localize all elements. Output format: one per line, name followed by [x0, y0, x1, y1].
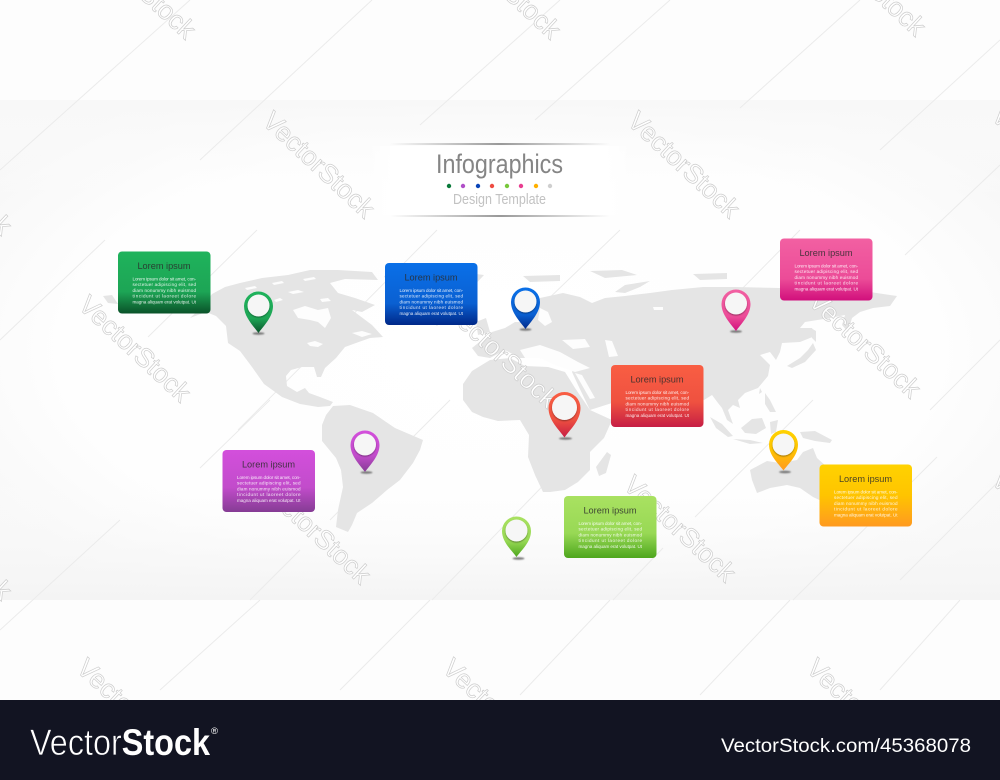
panel: purple: diam nonummy nibh euismod: [237, 486, 301, 491]
panel: green: [118, 252, 210, 314]
registered mark: ®: [211, 726, 218, 737]
australia: [750, 448, 838, 505]
panel: purple: [222, 450, 315, 512]
panel: lime: diam nonummy nibh euismod: [578, 532, 642, 537]
pin: green: [244, 292, 273, 335]
russian arctic islands: [523, 270, 727, 293]
south america: [322, 405, 423, 532]
panel: blue: diam nonummy nibh euismod: [400, 299, 463, 304]
panel: yellow: diam nonummy nibh euismod: [834, 501, 898, 506]
panel: red: diam nonummy nibh euismod: [626, 401, 689, 406]
panel: yellow: Lorem ipsum dolor sit amet, con-: [834, 490, 898, 494]
title: Infographics: [436, 149, 563, 179]
greenland: [384, 270, 484, 326]
world map: [103, 270, 898, 532]
watermarks: VectorStock: [618, 469, 742, 588]
panel: pink: [780, 238, 872, 300]
pin: red: [548, 392, 580, 440]
panel: blue: Lorem ipsum: [404, 272, 458, 282]
colour dots: [447, 184, 552, 188]
panel: blue: magna aliquam erat volutpat. Ut: [400, 311, 464, 316]
pin: pink: [722, 290, 750, 333]
panel: pink: Lorem ipsum dolor sit amet, con-: [794, 264, 858, 268]
panel: purple: tincidunt ut laoreet dolore: [237, 492, 301, 497]
panel: lime: Lorem ipsum dolor sit amet, con-: [578, 521, 642, 526]
panel: green: diam nonummy nibh euismod: [132, 288, 196, 293]
watermarks: VectorStock: [257, 105, 381, 224]
panel: blue: Lorem ipsum dolor sit amet, con-: [400, 288, 463, 293]
watermarks: VectorStock: [803, 285, 927, 404]
central background band: [0, 100, 1000, 600]
africa: [463, 358, 612, 492]
watermarks: VectorStock: [71, 652, 195, 771]
panel: lime: Lorem ipsum: [583, 506, 637, 516]
panel: lime: [564, 496, 656, 558]
panel: green: tincidunt ut laoreet dolore: [132, 294, 196, 299]
new zealand: [888, 505, 898, 520]
pin: blue: [511, 288, 540, 331]
pin: purple: [350, 430, 380, 474]
watermarks: VectorStock: [440, 295, 564, 414]
watermarks: VectorStock: [801, 652, 925, 771]
panel: red: Lorem ipsum dolor sit amet, con-: [626, 390, 689, 395]
panel: pink: sectetuer adipiscing elit, sed: [794, 269, 858, 274]
panel: red: Lorem ipsum: [630, 374, 684, 384]
panel: blue: tincidunt ut laoreet dolore: [400, 305, 463, 310]
panel: purple: sectetuer adipiscing elit, sed: [237, 481, 301, 486]
pin: lime: [502, 516, 531, 560]
footer bar: [0, 700, 1000, 780]
panel: red: sectetuer adipiscing elit, sed: [626, 396, 689, 401]
watermarks: VectorStock: [73, 289, 197, 408]
watermarks: VectorStock: [622, 105, 746, 224]
panel: purple: Lorem ipsum: [242, 460, 295, 470]
panel: green: Lorem ipsum dolor sit amet, con-: [132, 276, 196, 282]
watermarks: VectorStock: [253, 471, 377, 590]
eurasia: [472, 287, 897, 424]
panel: blue: [385, 263, 478, 325]
southeast asia islands: [710, 388, 832, 444]
panel: green: magna aliquam erat volutpat. Ut: [132, 299, 197, 304]
uk and iceland: [455, 298, 490, 335]
panel: lime: sectetuer adipiscing elit, sed: [578, 527, 642, 532]
panel: yellow: tincidunt ut laoreet dolore: [834, 507, 898, 512]
panel: green: Lorem ipsum: [137, 261, 191, 271]
north america: [190, 270, 383, 407]
panel: red: [611, 365, 704, 427]
watermarks: VectorStock: [437, 652, 561, 771]
panel: pink: diam nonummy nibh euismod: [794, 275, 858, 280]
panel: yellow: Lorem ipsum: [839, 474, 892, 484]
footer url: VectorStock.com/45368078: [721, 736, 971, 757]
panel: red: magna aliquam erat volutpat. Ut: [626, 413, 690, 418]
panel: yellow: sectetuer adipiscing elit, sed: [834, 495, 898, 500]
inland water: [245, 277, 663, 399]
panel: yellow: magna aliquam erat volutpat. Ut: [834, 512, 898, 517]
panel: green: sectetuer adipiscing elit, sed: [132, 282, 196, 287]
panel: purple: Lorem ipsum dolor sit amet, con-: [237, 475, 301, 480]
panel: pink: tincidunt ut laoreet dolore: [794, 281, 858, 286]
japan and sakhalin: [787, 328, 816, 368]
panel: lime: magna aliquam erat volutpat. Ut: [578, 544, 643, 549]
pin: yellow: [769, 430, 798, 473]
subtitle: Design Template: [453, 191, 546, 208]
panel: pink: magna aliquam erat volutpat. Ut: [794, 286, 859, 291]
panel: red: tincidunt ut laoreet dolore: [626, 407, 689, 412]
footer logo: VectorStock: [30, 722, 210, 763]
panel: blue: sectetuer adipiscing elit, sed: [400, 294, 463, 299]
panel: pink: Lorem ipsum: [799, 248, 853, 258]
panel: purple: magna aliquam erat volutpat. Ut: [237, 498, 301, 503]
panel: yellow: [820, 464, 912, 526]
title panel: [367, 143, 632, 217]
chukotka wrap: [103, 295, 118, 304]
madagascar: [596, 452, 611, 476]
panel: lime: tincidunt ut laoreet dolore: [578, 538, 642, 543]
